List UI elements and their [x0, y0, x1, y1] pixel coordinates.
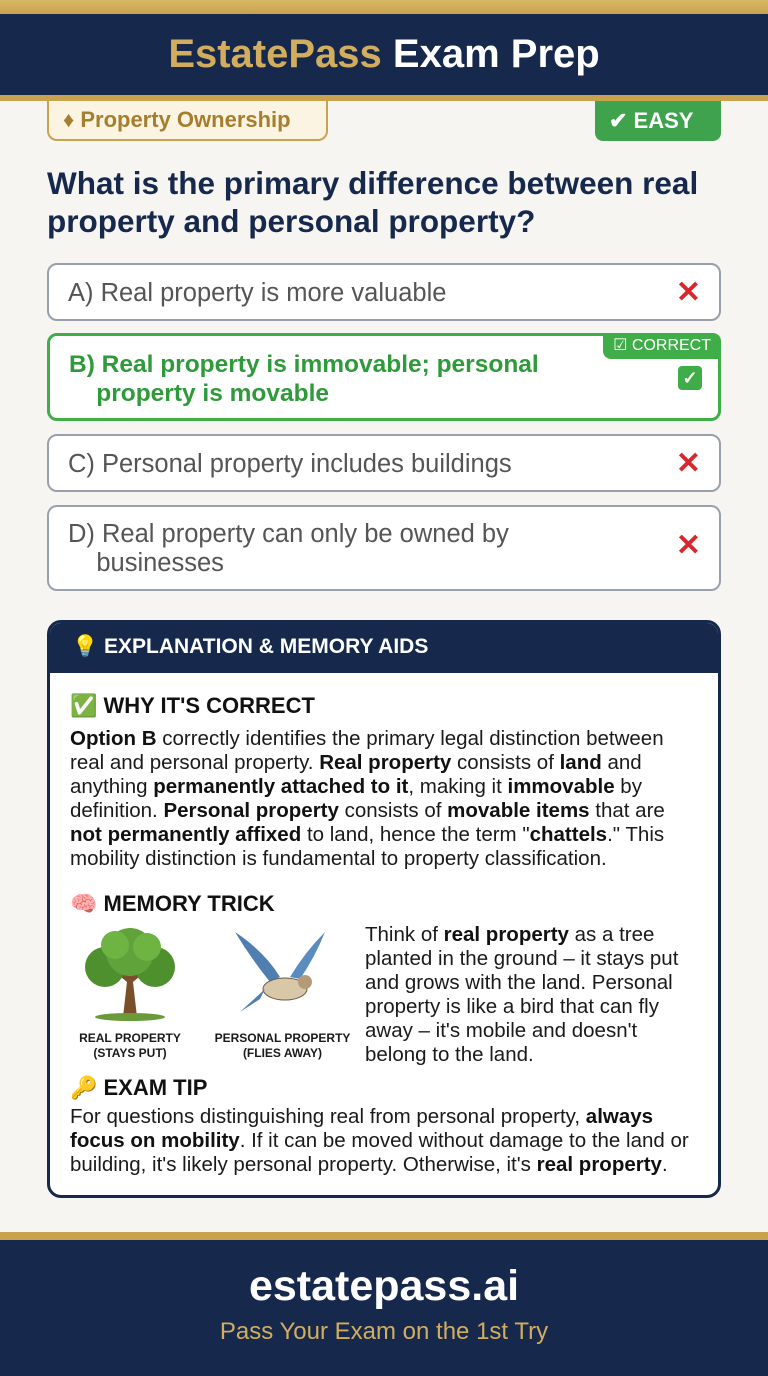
correct label — [603, 333, 721, 359]
tagline: Pass Your Exam on the 1st Try — [220, 1318, 548, 1345]
option B correct: B) Real property is immovable; personal — [69, 351, 539, 378]
header banner — [0, 0, 768, 101]
why correct: ✅ WHY IT'S CORRECT — [70, 693, 315, 718]
option D: D) Real property can only be owned by — [68, 520, 509, 548]
title: EstatePass Exam Prep — [168, 32, 600, 76]
label: real property: (STAYS PUT) — [93, 1046, 167, 1060]
label: real property: REAL PROPERTY — [79, 1031, 181, 1045]
option C: C) Personal property includes buildings — [68, 450, 512, 478]
option D — [47, 505, 721, 591]
memory trick — [70, 891, 678, 1066]
label: personal property — [215, 1031, 350, 1060]
icon: tree — [85, 928, 175, 1021]
difficulty badge: ✔ EASY — [609, 108, 693, 133]
option C — [47, 434, 721, 492]
option A: ✕ — [676, 276, 701, 309]
option A — [47, 263, 721, 321]
option B correct — [47, 333, 721, 421]
category tag — [47, 101, 328, 141]
difficulty badge — [595, 101, 721, 141]
explanation panel — [47, 620, 721, 1198]
panel header — [50, 623, 718, 673]
question: What is the primary difference between real property and personal property? — [47, 165, 698, 239]
option A: A) Real property is more valuable — [68, 279, 446, 307]
footer site: estatepass.ai — [249, 1262, 519, 1310]
exam tip: 🔑 EXAM TIP — [70, 1075, 207, 1100]
label: personal property: (FLIES AWAY) — [243, 1046, 322, 1060]
category tag: ♦ Property Ownership — [63, 107, 291, 132]
icon: bird — [235, 932, 325, 1012]
check icon — [678, 366, 702, 390]
option C: ✕ — [676, 447, 701, 480]
memory text: Think of real property as a tree planted in the ground – it stays put and grows with the land. Personal property is like a bird that can fly away – it's mobile and doesn't belong to the land. — [365, 923, 678, 1066]
option D: businesses — [96, 549, 224, 577]
footer — [0, 1232, 768, 1376]
why correct: Option B correctly identifies the primary legal distinction between real and personal property. Real property consists of land and anything permanently attached to it, making it immovable by definition. Personal property consists of movable items that are not permanently affixed to land, hence the term "chattels." This mobility distinction is fundamental to property classification. — [70, 727, 665, 870]
panel header: 💡 EXPLANATION & MEMORY AIDS — [72, 635, 428, 658]
option B correct: property is movable — [96, 380, 329, 407]
memory trick: 🧠 MEMORY TRICK — [70, 891, 275, 916]
correct label: ☑ CORRECT — [613, 337, 711, 354]
exam tip: For questions distinguishing real from personal property, always focus on mobility. If it can be moved without damage to the land or building, it's likely personal property. Otherwise, it's real property. — [70, 1105, 689, 1176]
option D: ✕ — [676, 529, 701, 562]
label: real property — [79, 1031, 181, 1060]
label: personal property: PERSONAL PROPERTY — [215, 1031, 350, 1045]
check icon: ✓ — [682, 368, 698, 388]
